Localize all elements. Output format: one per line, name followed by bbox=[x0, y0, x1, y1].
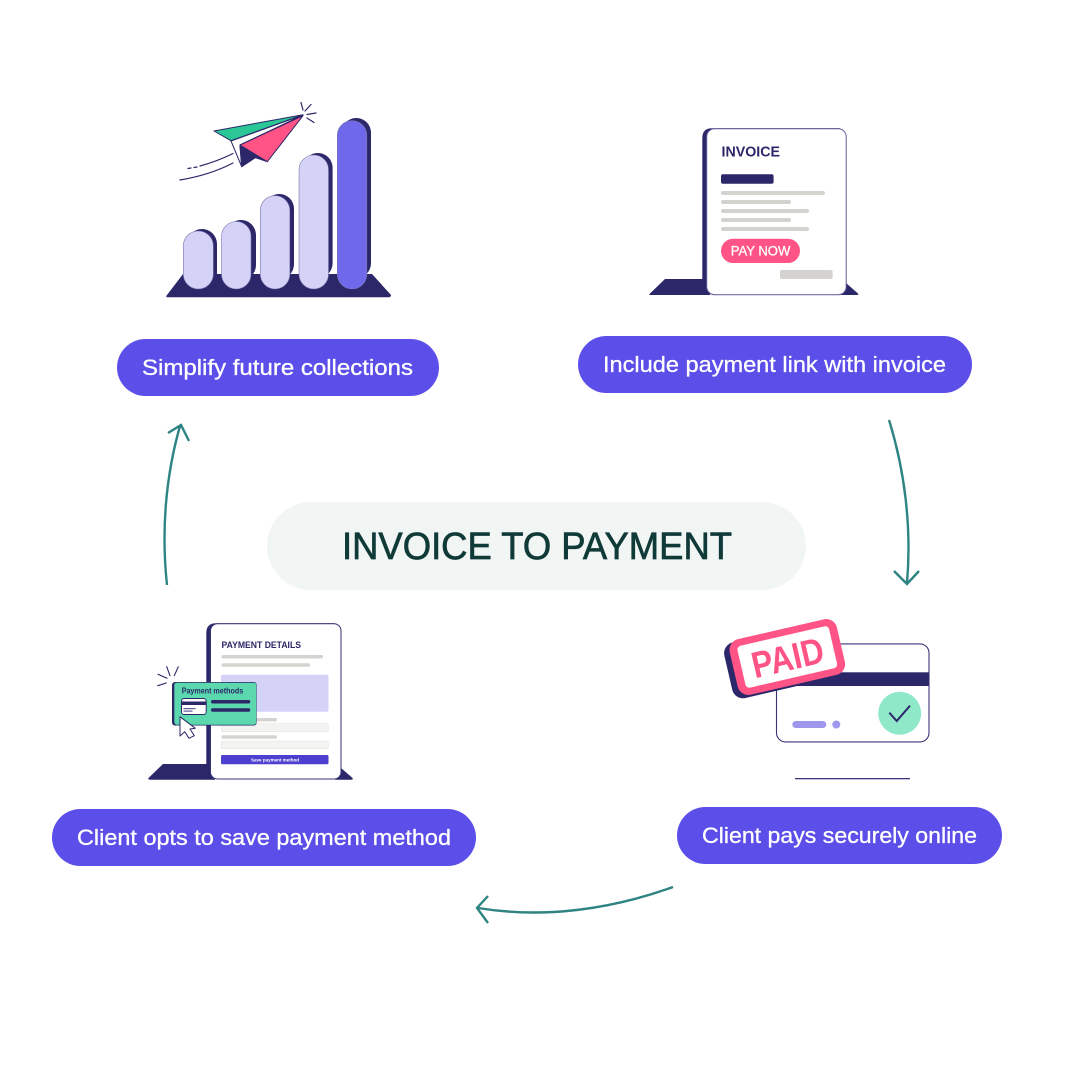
document back bbox=[702, 128, 840, 290]
pay now button: PAY NOW bbox=[731, 244, 791, 259]
chart base bbox=[166, 274, 391, 297]
pay now button bbox=[721, 239, 800, 263]
step pill: client opts to save payment method: Client opts to save payment method bbox=[77, 825, 451, 850]
amount bar bbox=[721, 174, 774, 184]
form sheet bbox=[210, 624, 341, 779]
payment methods card: Payment methods bbox=[182, 686, 244, 696]
title bbox=[267, 502, 806, 590]
payment methods card bbox=[172, 682, 257, 726]
step pill: include payment link with invoice: Include payment link with invoice bbox=[603, 352, 946, 377]
card stripe bbox=[776, 672, 929, 686]
step pill: client pays securely online bbox=[677, 807, 1002, 864]
form back bbox=[206, 623, 335, 775]
invoice title: INVOICE bbox=[722, 144, 780, 160]
icon: payment details form bbox=[148, 623, 353, 780]
credit card bbox=[776, 644, 929, 742]
step pill: client pays securely online: Client pays securely online bbox=[702, 823, 977, 848]
grey total bar bbox=[780, 270, 833, 279]
icon: paid credit card bbox=[721, 617, 929, 779]
lavender panel bbox=[221, 675, 328, 712]
title: INVOICE TO PAYMENT bbox=[342, 526, 732, 568]
bars bbox=[183, 118, 371, 289]
form base bbox=[148, 764, 353, 780]
form title: PAYMENT DETAILS bbox=[222, 640, 301, 651]
save button bbox=[221, 755, 328, 764]
ground line bbox=[795, 778, 910, 779]
check badge bbox=[878, 692, 921, 735]
motion lines and sparks bbox=[180, 102, 316, 180]
step pill: simplify future collections: Simplify future collections bbox=[142, 355, 413, 380]
paper plane bbox=[214, 115, 303, 167]
icon: invoice document bbox=[649, 128, 858, 295]
arrow: invoice to paid bbox=[889, 420, 919, 584]
arrow: paid to save method bbox=[477, 887, 673, 923]
document base bbox=[649, 279, 858, 295]
form inputs bbox=[221, 724, 328, 749]
save button: Save payment method bbox=[251, 758, 299, 764]
invoice sheet bbox=[707, 129, 846, 295]
form lines bbox=[222, 655, 323, 739]
step pill: include payment link with invoice bbox=[578, 336, 972, 393]
text lines bbox=[721, 191, 825, 231]
click sparks bbox=[158, 667, 178, 686]
cursor bbox=[180, 717, 195, 738]
arrow: save method to simplify bbox=[165, 425, 189, 585]
card number pills bbox=[792, 720, 840, 728]
step pill: simplify future collections bbox=[117, 339, 439, 396]
paid stamp: PAID bbox=[748, 630, 828, 686]
step pill: client opts to save payment method bbox=[52, 809, 476, 866]
paid stamp bbox=[721, 617, 848, 700]
icon: bar chart with paper plane bbox=[166, 102, 391, 297]
